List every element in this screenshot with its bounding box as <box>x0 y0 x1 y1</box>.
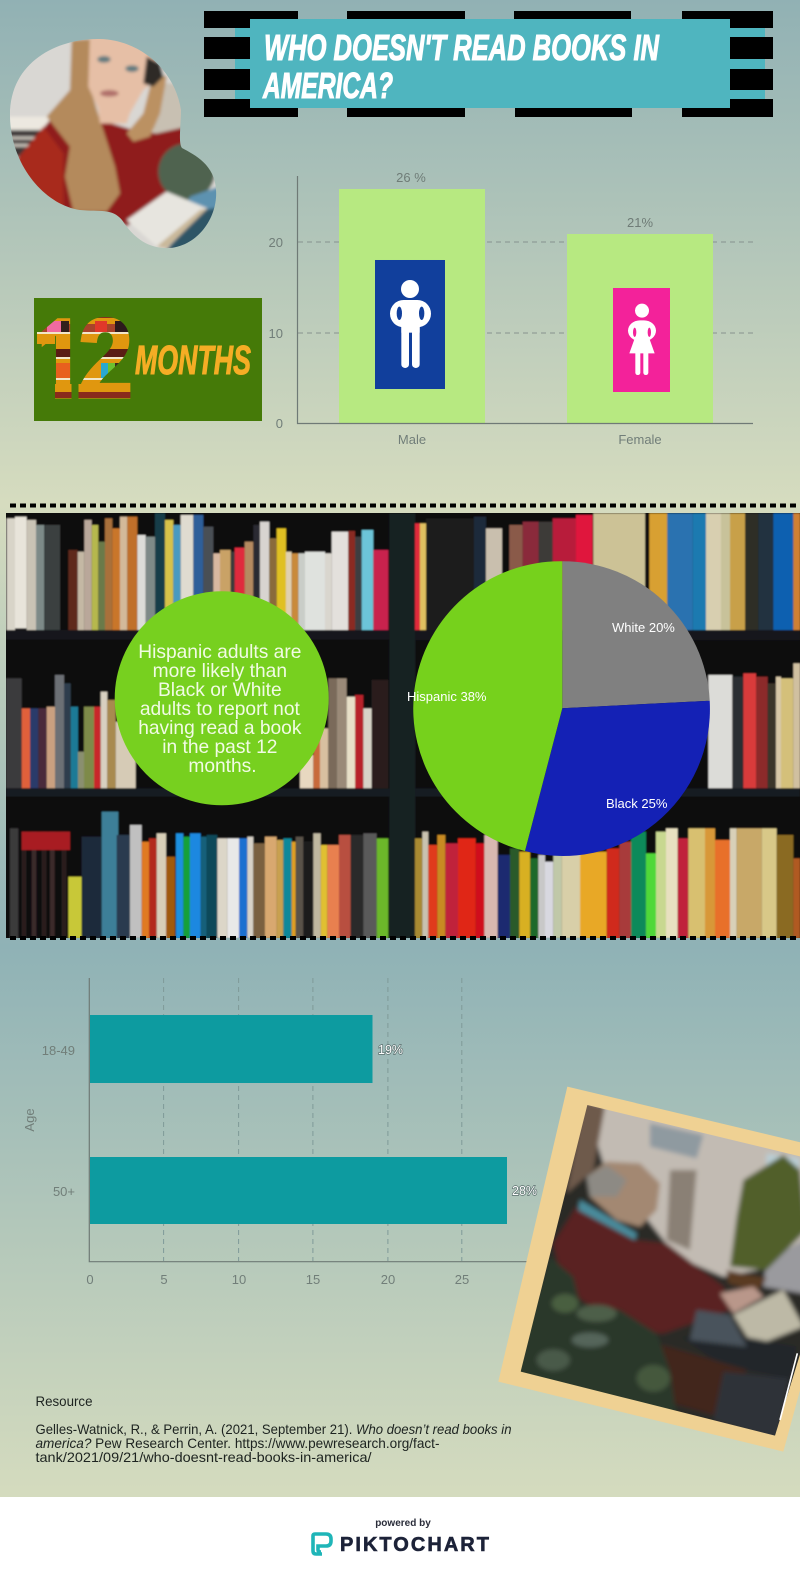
callout circle: Hispanic adults <box>115 591 329 805</box>
slice: Hispanic 38% <box>413 561 562 851</box>
callout circle: Hispanic adults: having read a book <box>138 718 302 739</box>
bar: 18-49 <box>90 1015 372 1083</box>
legs and chair <box>744 1335 770 1351</box>
photo: older man reading <box>498 1087 800 1452</box>
axis title: Age: Age <box>22 1108 37 1132</box>
bar: female <box>567 234 713 423</box>
left middle row <box>6 675 388 788</box>
number 12 <box>37 296 133 421</box>
right middle row <box>708 663 800 788</box>
central pillar <box>389 513 415 942</box>
bar: male <box>339 189 485 423</box>
callout circle: Hispanic adults: Black or White <box>158 680 282 701</box>
title text <box>262 27 660 106</box>
x axis labels: 25 <box>455 1272 469 1287</box>
y axis labels: 20 <box>269 235 283 250</box>
bar chart: gender <box>269 170 753 447</box>
bookshelf section <box>0 505 800 945</box>
left bottom row <box>10 812 388 938</box>
12 months badge <box>34 296 262 421</box>
hair <box>47 38 120 212</box>
category label: 18-49: 18-49 <box>42 1043 75 1058</box>
category label: female: Female <box>618 432 662 447</box>
photo: bookshelf <box>0 505 800 945</box>
head <box>587 1162 660 1227</box>
slice: Black 25% <box>525 701 710 856</box>
left top row <box>7 513 388 630</box>
callout circle: Hispanic adults: in the past 12 <box>162 737 277 758</box>
title banner <box>204 11 773 117</box>
vertical gridlines <box>164 978 462 1261</box>
label: Hispanic: Hispanic 38% <box>407 689 487 704</box>
footer <box>0 1497 800 1577</box>
callout circle: Hispanic adults: Hispanic adults are <box>138 642 301 663</box>
banner black stripes <box>204 11 773 117</box>
right top row <box>415 513 800 630</box>
x axis labels: 15 <box>306 1272 320 1287</box>
powered by: powered by <box>375 1518 431 1529</box>
x axis labels: 0 <box>86 1272 94 1287</box>
jeans <box>170 186 216 248</box>
digit 1 base mask <box>35 376 78 400</box>
bar: 50+ <box>90 1157 507 1224</box>
y axis labels: 0 <box>276 416 283 431</box>
pie chart: race <box>407 561 710 856</box>
value label: 28%: 28% <box>512 1183 537 1198</box>
value label: 19%: 19% <box>378 1042 403 1057</box>
photo frame <box>498 1087 800 1452</box>
icon: male figure <box>375 260 445 389</box>
value label: female: 21% <box>627 215 653 230</box>
number 12: 1 <box>37 296 85 421</box>
callout circle: Hispanic adults: adults to report not <box>140 699 300 720</box>
man's sweater <box>553 1207 730 1333</box>
citation text: Gelles-Watnick, R., & Perrin, A. (2021, September 21). Who doesn’t read books in <box>36 1421 512 1437</box>
y axis labels <box>269 235 283 431</box>
x axis labels: 5 <box>160 1272 168 1287</box>
collar <box>578 1200 637 1240</box>
y axis labels: 10 <box>269 326 283 341</box>
icon: female figure <box>613 288 670 392</box>
dashed top border <box>10 504 800 508</box>
face <box>88 33 157 123</box>
slice: White 20% <box>562 561 710 708</box>
photo: woman reading <box>10 39 216 248</box>
plant <box>158 143 215 200</box>
right bottom row <box>415 828 800 938</box>
digit 1 flag <box>37 332 55 344</box>
citation text: america? Pew Research Center. https://www.pewresearch.org/fact- <box>36 1435 440 1451</box>
hand and book <box>720 1287 763 1313</box>
label: White: White 20% <box>612 620 675 635</box>
title text: AMERICA? <box>262 65 393 106</box>
dashed bottom border <box>10 936 800 940</box>
right shelves <box>415 630 800 797</box>
left shelves <box>6 630 389 797</box>
gridlines <box>298 242 753 333</box>
foreground leaves <box>521 1260 675 1410</box>
bar chart: age <box>22 978 537 1287</box>
photo white edge <box>780 1353 797 1420</box>
callout circle: Hispanic adults: months. <box>188 756 257 777</box>
x axis labels: 10 <box>232 1272 246 1287</box>
x axis labels <box>86 1272 469 1287</box>
label: Black: Black 25% <box>606 796 668 811</box>
x axis labels: 20 <box>381 1272 395 1287</box>
icon: piktochart logo <box>313 1534 331 1554</box>
axes <box>298 176 753 424</box>
months label: MONTHS <box>135 337 251 383</box>
number 12: 2 <box>78 296 133 421</box>
banner teal panel <box>235 19 765 108</box>
resource heading: Resource <box>36 1393 93 1409</box>
resource citation <box>36 1393 512 1465</box>
window curtains <box>583 1097 800 1277</box>
citation text <box>36 1421 512 1465</box>
citation text: tank/2021/09/21/who-doesnt-read-books-in-america/ <box>36 1449 372 1465</box>
book <box>127 192 207 248</box>
stacked books <box>713 1372 788 1440</box>
axes <box>89 978 528 1262</box>
category label: male: Male <box>398 432 426 447</box>
sweater <box>42 119 181 228</box>
value label: male: 26 % <box>396 170 426 185</box>
category label: 50+: 50+ <box>53 1184 75 1199</box>
plant <box>730 1155 800 1270</box>
callout circle: Hispanic adults: more likely than <box>153 661 287 682</box>
piktochart wordmark: PIKTOCHART <box>340 1534 489 1556</box>
